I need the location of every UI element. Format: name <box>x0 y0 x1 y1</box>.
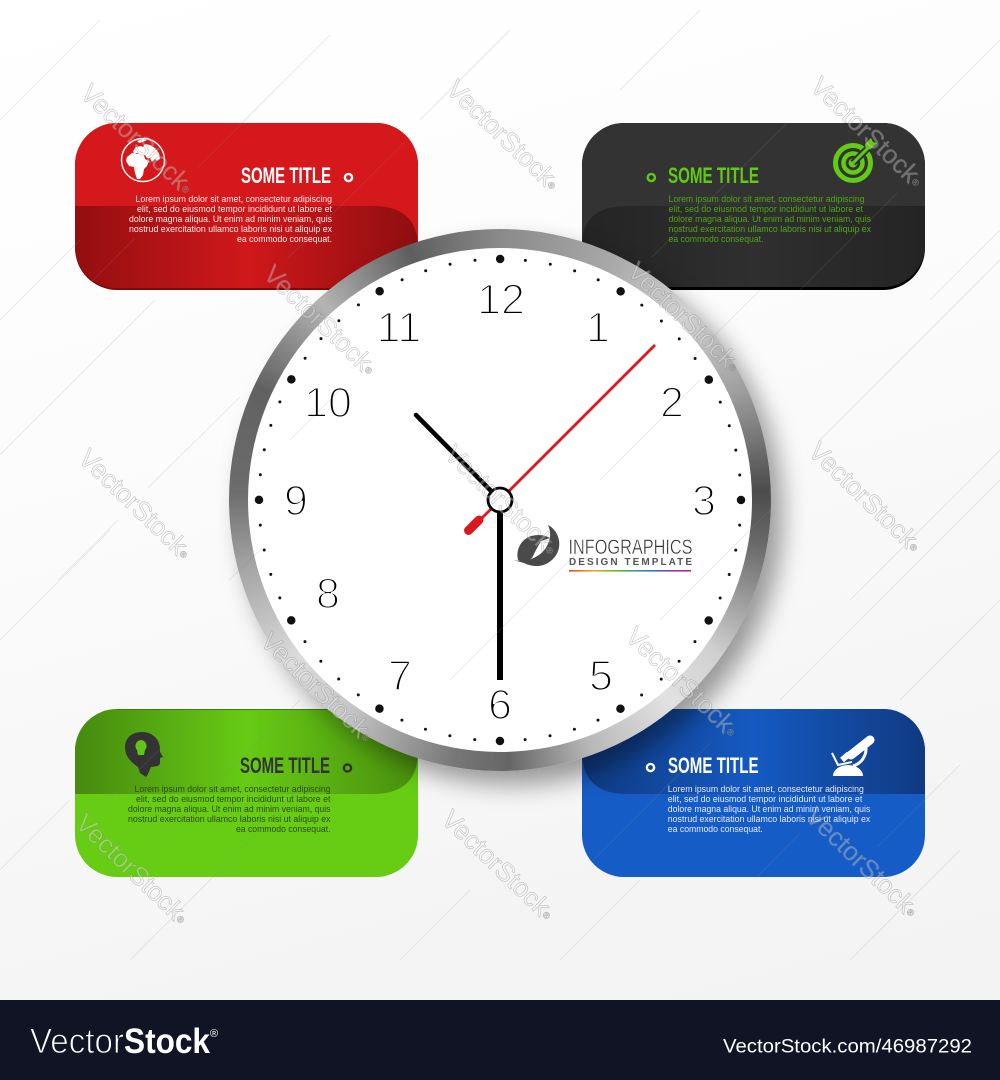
text block: dark card body: nostrud exercitation ullamco laboris nisi ut aliquip ex <box>668 224 871 234</box>
watermarks: ® <box>174 913 186 926</box>
clock numerals: 11 <box>377 304 421 352</box>
text block: dark card body: Lorem ipsum dolor sit amet, consectetur adipiscing <box>668 194 864 204</box>
text block: red card body: Lorem ipsum dolor sit amet, consectetur adipiscing <box>136 194 332 204</box>
watermarks: VectorStock <box>73 443 193 561</box>
icon: head with light bulb <box>125 732 163 777</box>
icon: swoosh globe logo <box>513 525 559 566</box>
text block: blue card body: elit, sed do eiusmod tempor incididunt ut labore et <box>668 794 863 804</box>
panel: red card <box>75 123 418 290</box>
watermarks: VectorStock <box>803 436 923 554</box>
watermarks: VectorStock <box>75 78 195 196</box>
text block: dark card body: dolore magna aliqua. Ut enim ad minim veniam, quis <box>668 214 871 224</box>
footer logo: ® <box>210 1028 218 1040</box>
watermarks: ® <box>543 544 555 557</box>
heading: green card title: SOME TITLE <box>240 753 330 778</box>
watermarks: VectorStock <box>258 259 378 377</box>
watermarks: ® <box>904 906 916 919</box>
footer logo: VectorStock.com/46987292 <box>723 1036 972 1058</box>
watermarks: VectorStock <box>805 71 925 189</box>
icon: microscope <box>832 740 870 776</box>
watermarks: ® <box>540 909 552 922</box>
logo: infographics design template <box>513 525 692 572</box>
clock numerals: 2 <box>660 379 684 427</box>
heading: infographics: INFOGRAPHICS <box>568 536 692 559</box>
minute dots <box>259 259 741 741</box>
footer bar <box>0 1000 1000 1080</box>
text block: blue card body: dolore magna aliqua. Ut enim ad minim veniam, quis <box>668 804 871 814</box>
watermarks: VectorStock <box>439 439 559 557</box>
panel: dark card <box>582 123 925 290</box>
icon: dark card marker <box>648 174 655 181</box>
watermarks: VectorStock <box>620 621 740 739</box>
watermarks <box>70 71 931 931</box>
watermarks: VectorStock <box>70 808 190 926</box>
clock minute hand <box>497 500 503 680</box>
text block: red card body: dolore magna aliqua. Ut enim ad minim veniam, quis <box>129 214 332 224</box>
text block: dark card body: elit, sed do eiusmod tempor incididunt ut labore et <box>668 204 863 214</box>
clock centre pin <box>488 488 512 512</box>
clock numerals: 12 <box>477 276 525 324</box>
text block: blue card body: nostrud exercitation ullamco laboris nisi ut aliquip ex <box>668 814 871 824</box>
clock numerals: 8 <box>316 570 340 618</box>
watermarks: ® <box>724 726 736 739</box>
text block: green card body: elit, sed do eiusmod tempor incididunt ut labore et <box>136 794 331 804</box>
text: design template: DESIGN TEMPLATE <box>569 557 692 568</box>
clock numerals: 1 <box>586 304 610 352</box>
clock numerals: 6 <box>488 681 512 729</box>
panel: green card <box>75 709 418 877</box>
watermarks: VectorStock <box>255 626 375 744</box>
footer logo: Stock <box>124 1022 210 1061</box>
icon: red card marker <box>345 174 352 181</box>
heading: dark card title: SOME TITLE <box>668 163 759 188</box>
clock hour hand <box>416 415 500 500</box>
heading: blue card title: SOME TITLE <box>668 753 758 778</box>
watermarks: VectorStock <box>441 74 561 192</box>
heading: red card title: SOME TITLE <box>241 163 331 188</box>
clock numerals <box>284 276 716 729</box>
clock metal ring <box>229 229 771 771</box>
text block: red card body: nostrud exercitation ullamco laboris nisi ut aliquip ex <box>129 224 332 234</box>
clock second hand <box>468 345 655 530</box>
footer logo: Vector <box>30 1022 124 1061</box>
text block: green card body: ea commodo consequat. <box>236 824 330 834</box>
clock numerals: 5 <box>589 652 613 700</box>
watermarks: ® <box>726 361 738 374</box>
rainbow rule <box>569 570 691 572</box>
watermarks: ® <box>545 179 557 192</box>
panel: blue card <box>582 709 925 877</box>
clock numerals: 10 <box>304 379 352 427</box>
icon: globe <box>122 138 164 182</box>
text block: dark card body: ea commodo consequat. <box>668 234 764 244</box>
text block: green card body: Lorem ipsum dolor sit amet, consectetur adipiscing <box>134 784 330 794</box>
text block: blue card body: ea commodo consequat. <box>668 824 763 834</box>
clock numerals: 9 <box>284 477 308 525</box>
watermarks: ® <box>179 183 191 196</box>
text block: red card body: elit, sed do eiusmod tempor incididunt ut labore et <box>137 204 332 214</box>
watermarks: ® <box>177 548 189 561</box>
watermarks: ® <box>359 731 371 744</box>
icon: blue card marker <box>647 764 654 771</box>
text block: blue card body: Lorem ipsum dolor sit amet, consectetur adipiscing <box>668 784 864 794</box>
text block: green card body: dolore magna aliqua. Ut enim ad minim veniam, quis <box>128 804 331 814</box>
text block: green card body: nostrud exercitation ullamco laboris nisi ut aliquip ex <box>128 814 331 824</box>
watermarks: VectorStock <box>622 256 742 374</box>
footer logo <box>30 1022 972 1061</box>
clock numerals: 3 <box>692 477 716 525</box>
watermarks: ® <box>909 176 921 189</box>
watermarks: VectorStock <box>436 804 556 922</box>
icon: green card marker <box>344 764 351 772</box>
watermarks: ® <box>362 364 374 377</box>
watermarks: VectorStock <box>800 801 920 919</box>
icon: target <box>836 138 877 180</box>
text block: red card body: ea commodo consequat. <box>237 234 332 244</box>
clock numerals: 7 <box>388 652 412 700</box>
watermarks: ® <box>907 541 919 554</box>
hour dots <box>259 259 741 741</box>
